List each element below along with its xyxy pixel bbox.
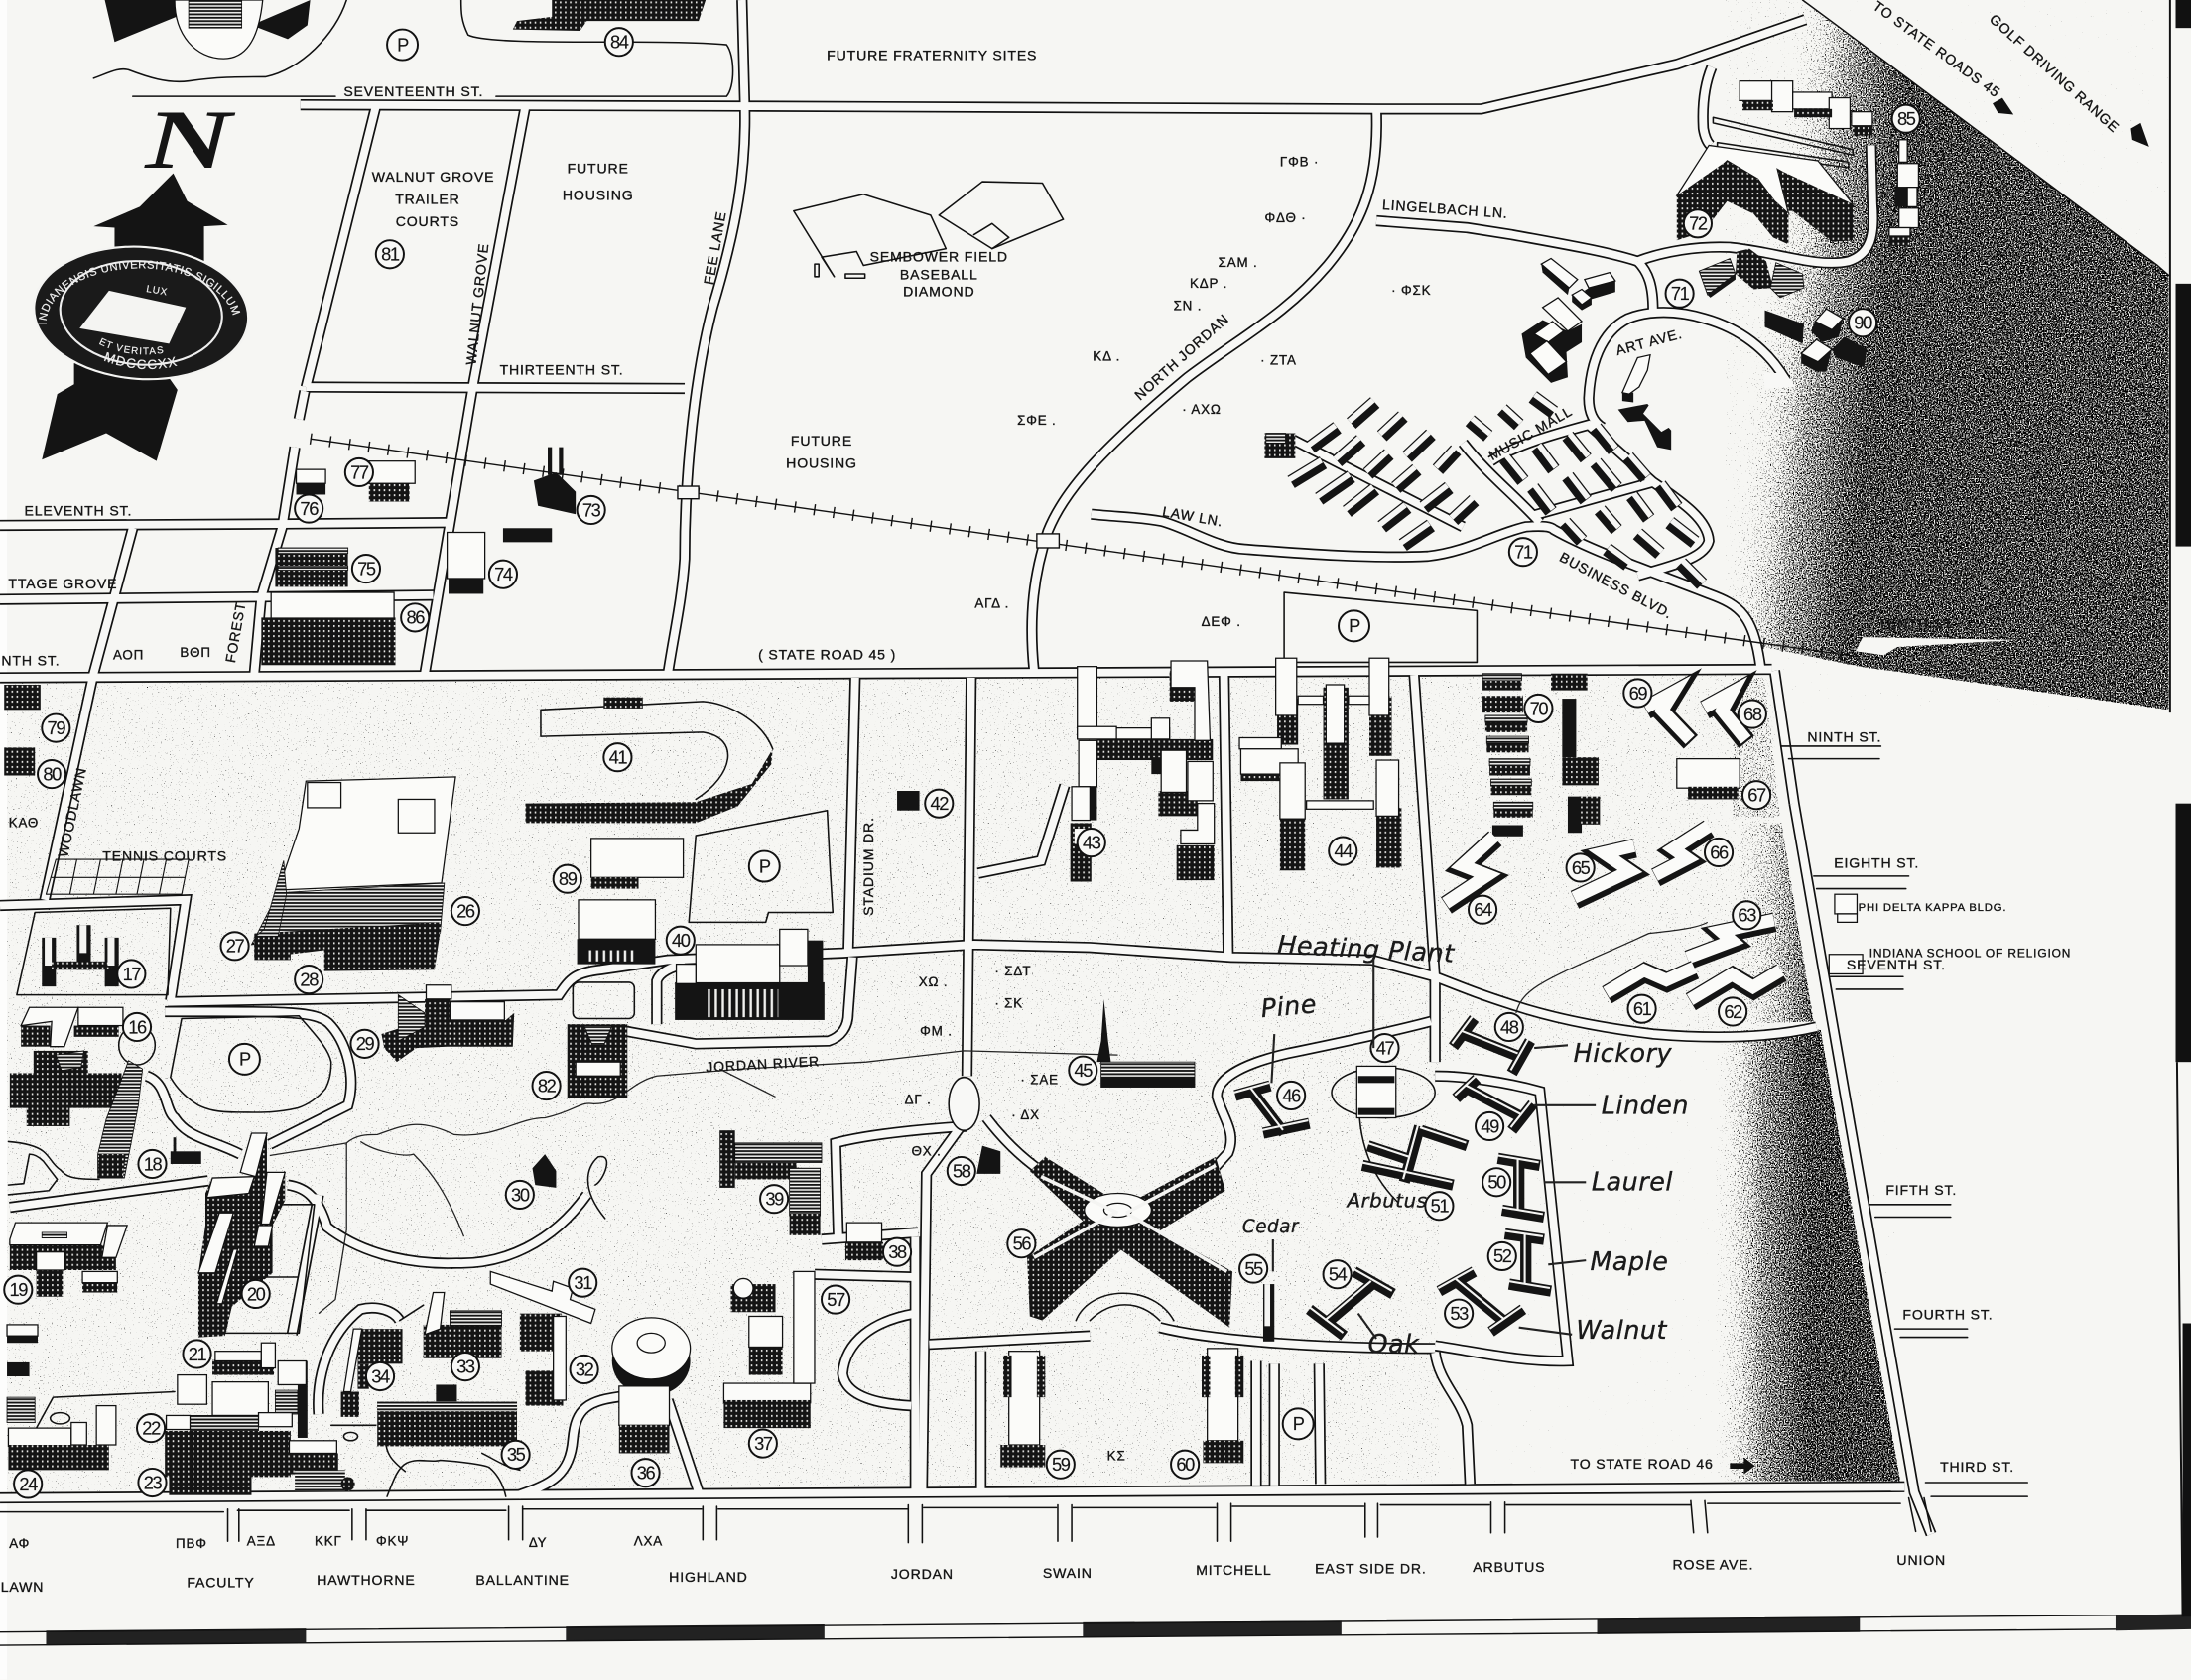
numbered building markers: 48 bbox=[1500, 1016, 1519, 1037]
H-shaped residence halls bbox=[1234, 1015, 1551, 1342]
building 30 bbox=[533, 1154, 556, 1188]
street and area labels: BASEBALL bbox=[900, 267, 978, 283]
street and area labels: SEVENTEENTH ST. bbox=[343, 83, 483, 99]
numbered building markers: 63 bbox=[1738, 905, 1756, 926]
numbered building markers: 84 bbox=[610, 32, 629, 53]
building 62 bbox=[1690, 970, 1781, 1002]
street and area labels: FEE LANE bbox=[701, 210, 729, 286]
street and area labels: LINGELBACH LN. bbox=[1382, 196, 1508, 221]
buildings north-west bbox=[4, 448, 576, 776]
street and area labels: FOREST bbox=[222, 600, 249, 664]
numbered building markers: 52 bbox=[1493, 1245, 1512, 1266]
seal rim bbox=[28, 238, 255, 388]
fraternity and sorority Greek letter labels: · ΣΚ bbox=[994, 995, 1023, 1010]
building 41 stadium bbox=[525, 698, 773, 823]
stadium, top left bbox=[105, 0, 311, 59]
hall 46 Pine bbox=[1234, 1083, 1309, 1133]
numbered building markers: 64 bbox=[1474, 899, 1492, 920]
street and area labels: FOURTH ST. bbox=[1902, 1306, 1994, 1322]
street and area labels: MITCHELL bbox=[1196, 1562, 1272, 1578]
numbered building markers: 19 bbox=[10, 1279, 28, 1300]
street and area labels: GOLF DRIVING RANGE bbox=[1987, 11, 2123, 136]
street and area labels: NORTH JORDAN bbox=[1131, 311, 1231, 403]
street and area labels: TENNIS COURTS bbox=[102, 847, 227, 863]
stippled strip behind buildings 67 and 68 bbox=[1733, 678, 1780, 818]
numbered building markers: 74 bbox=[494, 564, 513, 584]
hall 52 Maple bbox=[1503, 1230, 1551, 1291]
building 40 west block bbox=[578, 900, 655, 965]
building 74 bbox=[448, 528, 552, 593]
seal disc bbox=[31, 241, 252, 385]
numbered building markers: 71 bbox=[1671, 283, 1690, 304]
fraternity and sorority Greek letter labels: ΣΑΜ . bbox=[1219, 255, 1258, 270]
numbered building markers: 47 bbox=[1376, 1037, 1394, 1058]
small legend buildings bbox=[1829, 894, 1863, 973]
fraternity and sorority Greek letter labels: · ΑΧΩ bbox=[1182, 402, 1222, 417]
numbered building markers: 23 bbox=[144, 1472, 162, 1492]
street and area labels: JORDAN RIVER bbox=[706, 1053, 820, 1075]
fraternity and sorority Greek letter labels: ΑΓΔ . bbox=[974, 596, 1009, 611]
fraternity and sorority Greek letter labels: ΚΔ . bbox=[1093, 348, 1120, 363]
fraternity and sorority Greek letter labels: · ΦΣΚ bbox=[1391, 283, 1431, 298]
seal lettering: INDIANENSIS UNIVERSITATIS SIGILLUM bbox=[39, 260, 240, 323]
street and area labels: SEMBOWER FIELD bbox=[870, 248, 1008, 264]
numbered building markers: 82 bbox=[538, 1075, 557, 1096]
numbered building markers: 24 bbox=[19, 1474, 38, 1494]
street and area labels: HOUSING bbox=[563, 187, 634, 202]
numbered building markers: 62 bbox=[1724, 1001, 1742, 1022]
building 75 bbox=[275, 548, 348, 586]
street and area labels: BUSINESS BLVD. bbox=[1557, 549, 1675, 622]
numbered building markers: 43 bbox=[1083, 832, 1101, 852]
building 84 bbox=[513, 0, 706, 31]
numbered building markers: 32 bbox=[576, 1358, 594, 1379]
street and area labels: DIAMOND bbox=[903, 284, 974, 300]
numbered building markers: 45 bbox=[1075, 1060, 1093, 1081]
building 69 bbox=[1645, 693, 1691, 742]
fraternity and sorority Greek letter labels: ΚΣ bbox=[1107, 1449, 1126, 1464]
numbered building markers: 36 bbox=[637, 1463, 656, 1484]
building 19 bbox=[10, 1223, 127, 1297]
fraternity and sorority Greek letter labels: · ΔΧ bbox=[1011, 1107, 1040, 1122]
street and area labels: FUTURE bbox=[791, 433, 852, 449]
numbered building markers: 18 bbox=[144, 1153, 162, 1174]
numbered building markers: 57 bbox=[827, 1289, 845, 1310]
hall 51 Arbutus bbox=[1361, 1123, 1468, 1185]
building 68 bbox=[1704, 693, 1746, 742]
street and area labels: LAWN bbox=[1, 1579, 44, 1595]
numbered building markers: 16 bbox=[128, 1016, 147, 1037]
fraternity and sorority Greek letter labels: ΦΜ . bbox=[920, 1023, 953, 1038]
street and area labels: HAWTHORNE bbox=[317, 1572, 416, 1588]
building 63 bbox=[1687, 920, 1774, 960]
seal lettering: LUX bbox=[146, 284, 169, 299]
building 59 bbox=[1000, 1352, 1045, 1468]
fraternity and sorority Greek letter labels: ΑΟΠ bbox=[113, 648, 144, 663]
fraternity and sorority Greek letter labels: ΛΧΑ bbox=[634, 1533, 663, 1548]
street and area labels: NTH ST. bbox=[1, 652, 61, 668]
numbered building markers: 68 bbox=[1743, 704, 1762, 724]
right checkered border bbox=[2170, 0, 2191, 1616]
handwritten annotations bbox=[1242, 929, 1689, 1358]
street and area labels: FIFTH ST. bbox=[1885, 1182, 1957, 1198]
buildings east: residence centre bbox=[1264, 81, 2017, 655]
numbered building markers: 75 bbox=[357, 558, 376, 579]
building 90 bbox=[1765, 309, 1867, 372]
building 85 bbox=[1740, 81, 1918, 246]
numbered building markers: 65 bbox=[1572, 857, 1591, 878]
handwritten annotations: Laurel bbox=[1592, 1167, 1673, 1197]
numbered building markers: 60 bbox=[1176, 1454, 1195, 1475]
building 76 bbox=[297, 469, 325, 494]
numbered building markers: 86 bbox=[406, 607, 425, 628]
long building north of 18 bbox=[98, 1061, 143, 1178]
fraternity and sorority Greek letter labels: ΒΘΠ bbox=[180, 645, 211, 660]
fraternity and sorority Greek letter labels: ΣΝ . bbox=[1174, 299, 1202, 314]
building 44 bbox=[1239, 658, 1401, 870]
building 86 bbox=[261, 592, 396, 665]
fraternity and sorority Greek letter labels: ΚΚΓ bbox=[315, 1533, 342, 1548]
street and area labels: INDIANA SCHOOL OF RELIGION bbox=[1869, 947, 2071, 961]
street and area labels: TENTH ST. bbox=[1878, 616, 1956, 632]
street and area labels: EAST SIDE DR. bbox=[1315, 1561, 1427, 1577]
building 24 bbox=[8, 1406, 116, 1470]
hall 48 Hickory bbox=[1452, 1015, 1530, 1073]
street and area labels: THIRTEENTH ST. bbox=[500, 361, 624, 377]
building 60 bbox=[1202, 1349, 1243, 1463]
street and area labels: COURTS bbox=[396, 213, 459, 229]
parking markers: P bbox=[1349, 615, 1360, 636]
law and business quad buildings bbox=[1264, 395, 1704, 584]
numbered building markers: 38 bbox=[888, 1241, 907, 1262]
numbered building markers: 53 bbox=[1450, 1303, 1469, 1324]
bottom checkered border bbox=[0, 1614, 2191, 1645]
street and area labels: WALNUT GROVE bbox=[372, 169, 494, 185]
street and area labels: MUSIC MALL bbox=[1485, 403, 1575, 463]
street and area labels: TO STATE ROAD 46 bbox=[1571, 1456, 1714, 1472]
building 73 bbox=[534, 448, 576, 514]
numbered building markers: 31 bbox=[574, 1272, 592, 1293]
building 26 bbox=[251, 777, 455, 971]
parking markers: P bbox=[1293, 1413, 1305, 1434]
arrows beside road labels bbox=[1730, 98, 2149, 1475]
building 72 bbox=[1677, 145, 1855, 244]
street and area labels: TRAILER bbox=[395, 192, 460, 207]
building complex 16 bbox=[10, 1007, 123, 1126]
building 34 bbox=[341, 1329, 403, 1417]
numbered building markers: 89 bbox=[559, 868, 578, 889]
street and area labels: TO STATE ROADS 45 bbox=[1870, 0, 2003, 100]
street and area labels: LAW LN. bbox=[1161, 503, 1224, 530]
street and area labels: JORDAN bbox=[891, 1566, 954, 1582]
numbered building markers: 39 bbox=[765, 1189, 784, 1210]
shaded land, near buildings 61 to 63 bbox=[1740, 823, 1814, 1024]
building 33 bbox=[424, 1293, 502, 1358]
building 89 bbox=[591, 839, 684, 889]
handwritten annotations: Linden bbox=[1602, 1090, 1689, 1119]
numbered building markers: 37 bbox=[754, 1433, 773, 1454]
handwritten annotations: Walnut bbox=[1576, 1315, 1668, 1345]
street and area labels: WOODLAWN bbox=[55, 766, 89, 858]
building 71 north group bbox=[1699, 249, 1804, 298]
building 43 bbox=[1071, 661, 1215, 882]
building 37 bbox=[723, 1271, 815, 1428]
handwritten annotations: Arbutus bbox=[1345, 1190, 1427, 1213]
street and area labels: FUTURE bbox=[568, 161, 629, 177]
street and area labels: FACULTY bbox=[187, 1575, 255, 1591]
fraternity and sorority Greek letter labels: ΧΩ . bbox=[919, 974, 949, 989]
seal lettering: ET VERITAS bbox=[99, 337, 163, 355]
numbered building markers: 17 bbox=[123, 964, 141, 984]
fraternity and sorority Greek letter labels: ΘΧ . bbox=[912, 1144, 942, 1159]
open book bbox=[79, 291, 186, 343]
fraternity and sorority Greek letter labels: · ΖΤΑ bbox=[1260, 353, 1297, 368]
street and area labels: EIGHTH ST. bbox=[1834, 854, 1919, 870]
numbered building markers: 41 bbox=[609, 747, 627, 768]
seal lettering bbox=[39, 260, 240, 369]
numbered building markers bbox=[4, 28, 1920, 1498]
handwritten annotations: Pine bbox=[1259, 988, 1318, 1023]
handwritten annotations: Cedar bbox=[1242, 1217, 1300, 1237]
building 32 bbox=[520, 1314, 566, 1406]
numbered building markers: 77 bbox=[350, 461, 369, 482]
handwritten annotations: Heating Plant bbox=[1277, 929, 1456, 969]
street and area labels: ARBUTUS bbox=[1473, 1559, 1545, 1575]
fraternity and sorority Greek letter labels: ΔΓ . bbox=[905, 1092, 932, 1106]
parking markers: P bbox=[759, 855, 771, 876]
numbered building markers: 55 bbox=[1244, 1258, 1263, 1279]
building 20 bbox=[198, 1133, 285, 1338]
numbered building markers: 71 bbox=[1514, 542, 1533, 563]
building 36 bbox=[612, 1318, 691, 1453]
street and area labels: WALNUT GROVE bbox=[462, 242, 491, 366]
numbered building markers: 42 bbox=[931, 793, 949, 814]
letter N: N bbox=[144, 94, 236, 187]
numbered building markers: 54 bbox=[1329, 1264, 1348, 1285]
Sembower Field baseball diamond bbox=[794, 182, 1064, 278]
street and area labels: ART AVE. bbox=[1614, 325, 1684, 358]
building 35 bbox=[377, 1384, 517, 1446]
numbered building markers: 30 bbox=[511, 1184, 530, 1205]
numbered building markers: 20 bbox=[247, 1283, 266, 1304]
building 77 bbox=[369, 461, 415, 502]
fraternity and sorority Greek letter labels: · ΣΑΕ bbox=[1020, 1073, 1059, 1088]
street and area labels: STADIUM DR. bbox=[860, 817, 876, 916]
seal lettering: MDCCCXX bbox=[103, 351, 177, 369]
numbered building markers: 33 bbox=[456, 1356, 475, 1376]
building 61 bbox=[1607, 968, 1695, 995]
numbered building markers: 34 bbox=[371, 1365, 390, 1386]
parking markers: P bbox=[239, 1049, 251, 1070]
street and area labels: ELEVENTH ST. bbox=[24, 503, 132, 519]
scanned paper edge bbox=[0, 0, 7, 1680]
street and area labels: FUTURE FRATERNITY SITES bbox=[827, 48, 1037, 64]
fraternity and sorority Greek letter labels bbox=[9, 155, 1431, 1551]
numbered building markers: 27 bbox=[226, 936, 245, 957]
street and area labels: SWAIN bbox=[1043, 1565, 1093, 1581]
street and area labels: SEVENTH ST. bbox=[1847, 957, 1946, 972]
street and area labels: TTAGE GROVE bbox=[8, 576, 117, 591]
street and area labels: HOUSING bbox=[786, 455, 857, 471]
numbered building markers: 51 bbox=[1431, 1196, 1449, 1217]
building 57 bbox=[730, 1278, 776, 1312]
parking lots, courts and paths bbox=[17, 592, 1477, 1441]
handwritten annotations: Hickory bbox=[1574, 1038, 1673, 1068]
buildings 21 to 23 complex bbox=[165, 1343, 355, 1495]
numbered building markers: 58 bbox=[953, 1160, 971, 1181]
street and area labels: ( STATE ROAD 45 ) bbox=[758, 647, 896, 663]
fraternity and sorority Greek letter labels: · ΣΔΤ bbox=[994, 964, 1031, 978]
fraternity and sorority Greek letter labels: ΑΦ bbox=[9, 1536, 30, 1551]
hall 49 Linden bbox=[1455, 1076, 1533, 1130]
building 29 bbox=[381, 985, 514, 1062]
building 82 bbox=[568, 1024, 627, 1098]
numbered building markers: 67 bbox=[1747, 785, 1766, 806]
street and area labels: PHI DELTA KAPPA BLDG. bbox=[1859, 902, 2006, 914]
numbered building markers: 76 bbox=[300, 498, 319, 519]
fraternity and sorority Greek letter labels: ΔΥ bbox=[529, 1535, 547, 1550]
numbered building markers: 73 bbox=[582, 499, 601, 520]
numbered building markers: 59 bbox=[1052, 1454, 1071, 1475]
building 64 bbox=[1446, 837, 1495, 905]
numbered building markers: 80 bbox=[43, 763, 62, 784]
numbered building markers: 79 bbox=[48, 717, 65, 738]
shaded off-campus land, northeast bbox=[1726, 0, 2168, 710]
building 70 bbox=[1482, 674, 1600, 837]
numbered building markers: 70 bbox=[1530, 698, 1548, 718]
building 45 chapel bbox=[1096, 999, 1195, 1088]
north arrow and university seal bbox=[35, 94, 248, 461]
numbered building markers: 50 bbox=[1487, 1172, 1506, 1193]
building 40 auditorium bbox=[675, 929, 825, 1020]
street and area labels: UNION bbox=[1896, 1552, 1946, 1568]
numbered building markers: 28 bbox=[300, 969, 319, 989]
hall 53 Walnut bbox=[1438, 1268, 1523, 1332]
hall 50 Laurel bbox=[1496, 1155, 1544, 1217]
hall 54 Oak bbox=[1308, 1268, 1393, 1336]
numbered building markers: 66 bbox=[1710, 841, 1729, 862]
building 39 bbox=[719, 1130, 822, 1235]
building 65 bbox=[1574, 845, 1635, 900]
parking markers: P bbox=[397, 34, 409, 55]
Jordan River bbox=[270, 922, 1708, 1314]
shaded land, east of residence halls bbox=[1716, 1030, 1900, 1482]
edge buildings left bbox=[7, 1325, 38, 1422]
building 18 bbox=[171, 1137, 201, 1164]
Art Avenue buildings bbox=[1618, 355, 1795, 450]
west campus buildings bbox=[7, 698, 1243, 1495]
building 66 bbox=[1655, 827, 1709, 877]
street and area labels: THIRD ST. bbox=[1940, 1459, 2014, 1475]
buildings 79 and 80 bbox=[4, 685, 41, 776]
fraternity and sorority Greek letter labels: ΠΒΦ bbox=[176, 1536, 207, 1551]
building 56 X-shaped hall bbox=[1027, 1157, 1232, 1328]
fraternity and sorority Greek letter labels: ΔΕΦ . bbox=[1202, 614, 1241, 629]
numbered building markers: 46 bbox=[1282, 1085, 1301, 1105]
seal ring bbox=[57, 256, 225, 370]
numbered building markers: 69 bbox=[1629, 683, 1647, 704]
numbered building markers: 44 bbox=[1334, 840, 1353, 861]
fraternity and sorority Greek letter labels: ΣΦΕ . bbox=[1017, 413, 1057, 428]
numbered building markers: 56 bbox=[1013, 1233, 1031, 1254]
numbered building markers: 90 bbox=[1854, 313, 1872, 333]
numbered building markers: 29 bbox=[356, 1033, 375, 1054]
building 31 bbox=[490, 1271, 595, 1324]
numbered building markers: 35 bbox=[507, 1444, 526, 1465]
numbered building markers: 40 bbox=[672, 930, 691, 951]
buildings south of Lingelbach bbox=[1521, 259, 1615, 383]
railroad line bbox=[311, 439, 1859, 657]
fraternity and sorority Greek letter labels: ΦΔΘ · bbox=[1264, 210, 1307, 225]
numbered building markers: 21 bbox=[189, 1344, 207, 1364]
numbered building markers: 61 bbox=[1633, 998, 1652, 1019]
numbered building markers: 22 bbox=[142, 1417, 161, 1438]
street and area labels: BALLANTINE bbox=[475, 1572, 570, 1588]
numbered building markers: 81 bbox=[381, 244, 400, 265]
street and area labels: NINTH ST. bbox=[1807, 729, 1881, 745]
fraternity and sorority Greek letter labels: ΚΑΘ bbox=[9, 816, 39, 831]
fraternity and sorority Greek letter labels: ΓΦΒ · bbox=[1280, 155, 1319, 170]
building 42 bbox=[897, 791, 920, 811]
building 38 bbox=[845, 1223, 883, 1260]
central quadrangles bbox=[1071, 658, 1863, 1002]
numbered building markers: 49 bbox=[1481, 1115, 1499, 1136]
building 17 bbox=[42, 925, 119, 986]
parking markers bbox=[229, 30, 1369, 1439]
faint printing speckle across central campus bbox=[7, 674, 1774, 1492]
ribbon tail bbox=[42, 363, 178, 461]
building 67 bbox=[1677, 759, 1740, 799]
fraternity and sorority Greek letter labels: ΑΞΔ bbox=[247, 1533, 276, 1548]
hall 47 bbox=[1356, 1066, 1396, 1118]
building 27 bbox=[254, 860, 291, 960]
fraternity and sorority Greek letter labels: ΦΚΨ bbox=[376, 1533, 409, 1548]
Tenth Street underpass flash bbox=[1856, 637, 2017, 655]
numbered building markers: 85 bbox=[1897, 108, 1916, 129]
handwritten annotations: Oak bbox=[1368, 1329, 1420, 1358]
hall 55 Cedar bbox=[1263, 1284, 1274, 1342]
street and area labels: HIGHLAND bbox=[669, 1569, 748, 1585]
street and area labels: ROSE AVE. bbox=[1673, 1556, 1753, 1572]
fraternity and sorority Greek letter labels: ΚΔΡ . bbox=[1190, 276, 1227, 291]
numbered building markers: 26 bbox=[456, 900, 475, 921]
arrow shaft and head bbox=[93, 174, 228, 273]
numbered building markers: 72 bbox=[1689, 213, 1708, 234]
building 58 bbox=[976, 1146, 1000, 1174]
handwritten annotations: Maple bbox=[1590, 1246, 1668, 1276]
